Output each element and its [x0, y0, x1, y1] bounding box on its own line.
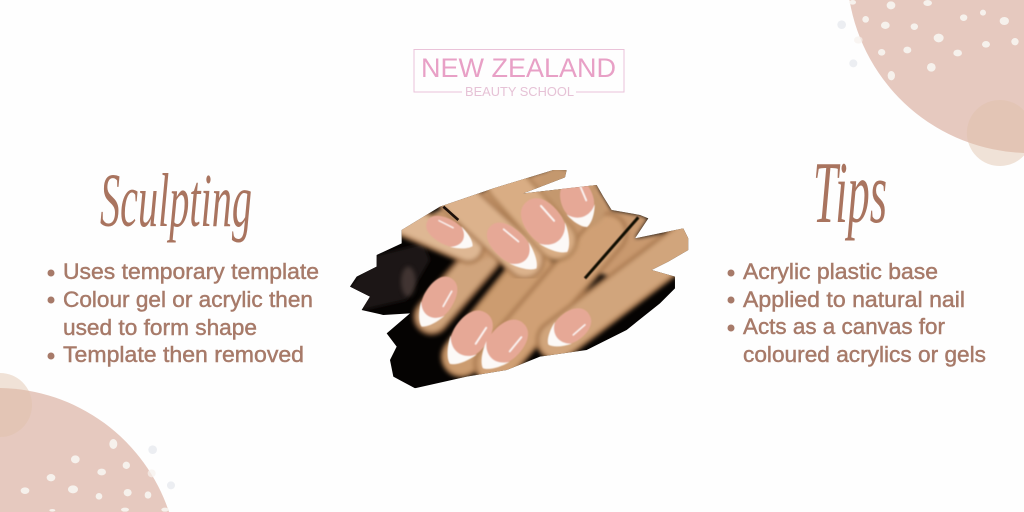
list: Sculpting points: Colour gel or acrylic then — [63, 287, 313, 312]
list: Tips points: coloured acrylics or gels — [743, 342, 986, 367]
list: Tips points — [728, 259, 986, 367]
decoration: bottom left circle with dots — [0, 373, 175, 512]
nails — [418, 186, 596, 370]
list: Sculpting points: Uses temporary template — [63, 259, 319, 284]
list: Tips points: Acts as a canvas for — [743, 314, 945, 339]
list: Sculpting points: Template then removed — [63, 342, 304, 367]
upper hand skin — [398, 168, 598, 260]
photo: manicured French tip nails in brush stroke mask — [347, 167, 693, 392]
list: Tips points: Applied to natural nail — [743, 287, 965, 312]
logo: New Zealand Beauty School — [414, 50, 624, 99]
lower hand skin — [432, 185, 693, 363]
list: Sculpting points — [48, 259, 319, 367]
finger gap top — [443, 207, 458, 220]
heading: Tips: Tips — [813, 145, 887, 242]
logo: New Zealand Beauty School: BEAUTY SCHOOL — [465, 84, 574, 99]
list: Tips points: Acrylic plastic base — [743, 259, 938, 284]
list: Sculpting points: used to form shape — [63, 315, 257, 340]
finger gap line — [585, 217, 638, 278]
logo: New Zealand Beauty School: NEW ZEALAND — [421, 53, 616, 83]
decoration: top right circle with dots — [837, 0, 1024, 166]
heading: Sculpting: Sculpting — [100, 159, 252, 243]
